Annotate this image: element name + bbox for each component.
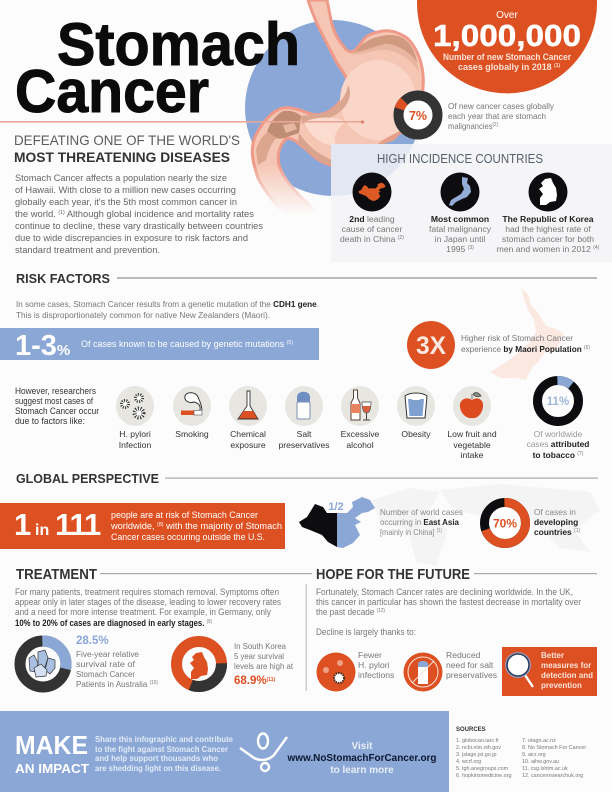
- text: researchers suggest: Stomach Cancer occur: [15, 406, 99, 416]
- callout: over 1,000,000: (1): [554, 63, 560, 69]
- stomach illustration: [252, 0, 423, 216]
- caption: tobacco: to tobacco: [533, 450, 575, 460]
- caption: China: [340, 214, 404, 244]
- banner: 1 in 111: 111: [55, 507, 101, 542]
- banner: 1-3%: [0, 328, 319, 362]
- caption: Japan: Most common: [431, 214, 489, 224]
- caption: Japan: in Japan until: [435, 234, 485, 244]
- text: visit: [287, 741, 436, 776]
- panel: better measures: [502, 647, 597, 696]
- map: China half highlighted: [299, 497, 375, 548]
- text: researchers suggest: suggest most cases of: [15, 396, 93, 406]
- text: hope paragraph: [316, 587, 581, 637]
- icon: obesity scale: [397, 386, 435, 426]
- text: Australia survival: (10): [150, 680, 158, 686]
- text: reduced salt: preservatives: [446, 670, 497, 680]
- banner: 1 in 111: worldwide,: [111, 521, 153, 531]
- risk factor labels: [119, 429, 497, 460]
- arrow line pointing to stomach: [0, 120, 364, 124]
- callout: 3X: [407, 321, 590, 369]
- callout: over 1,000,000: [417, 0, 597, 93]
- text: treatment paragraph: 10% to 20% of cases are diagnosed in early stages.: [15, 618, 229, 628]
- donut: 7%: 7%: [409, 109, 427, 123]
- subtitle: MOST THREATENING DISEASES: [14, 149, 230, 165]
- callout: 3X: Higher risk of Stomach Cancer: [461, 333, 573, 343]
- text: reduced salt: Reduced: [446, 650, 481, 660]
- text: 7% description: Of new cancer cases globally: [448, 101, 555, 111]
- icon: apple: [453, 386, 491, 426]
- text: Australia survival: 28.5%: [76, 635, 109, 647]
- text: East Asia: occurring in East Asia: [380, 517, 459, 527]
- icon: alcohol: [341, 386, 379, 426]
- intro paragraph: continue to decline, these vary drastically between countries: [15, 221, 263, 231]
- text: developing countries: (1): [574, 528, 580, 534]
- text: developing countries: developing: [534, 517, 578, 527]
- text: South Korea survival: [234, 641, 294, 687]
- caption: Japan: [429, 214, 492, 254]
- text: fewer H. pylori: H. pylori: [358, 660, 390, 670]
- caption: Korea: had the highest rate of: [505, 224, 591, 234]
- text: hope paragraph: the past decade: [316, 607, 379, 617]
- text: East Asia: (1): [437, 528, 442, 534]
- text: CDH1 gene: [16, 299, 319, 320]
- text: hope paragraph: Fortunately, Stomach Cancer rates are declining worldwide. In the UK,: [316, 587, 573, 597]
- text: researchers suggest: [15, 386, 99, 426]
- heading: global perspective: GLOBAL PERSPECTIVE: [16, 471, 159, 486]
- text: developing countries: Of cases in: [534, 507, 576, 517]
- callout: 3X: experience by Maori Population: [461, 344, 583, 354]
- text: CDH1 gene: In some cases, Stomach Cancer results from a genetic mutation of the CDH1 gene.: [16, 299, 319, 309]
- panel: better measures: measures for: [541, 661, 591, 670]
- map: New Zealand: [490, 288, 564, 380]
- text: reduced salt: need for salt: [446, 660, 494, 670]
- risk factor labels: Obesity: [401, 429, 431, 439]
- title: Stomach: [57, 11, 300, 78]
- intro paragraph: due to wide discrepancies in exposure to risk factors and: [15, 233, 248, 243]
- panel: better measures: prevention: [541, 681, 582, 690]
- sources: 1. globocan.iarc.fr: [456, 738, 499, 744]
- sources: 9. aicr.org: [522, 752, 546, 758]
- sources: 11. csg.lshtm.ac.uk: [522, 766, 568, 772]
- icon: chemical flask: [229, 386, 267, 426]
- divider: [306, 584, 307, 691]
- sources: SOURCES: [456, 727, 486, 733]
- risk factor labels: intake: [461, 450, 484, 460]
- text: South Korea survival: (11): [267, 677, 276, 683]
- caption: Japan: (3): [468, 245, 474, 251]
- caption: tobacco: Of worldwide: [534, 429, 583, 439]
- text: treatment paragraph: [15, 587, 282, 628]
- heading: high incidence countries: HIGH INCIDENCE COUNTRIES: [377, 152, 543, 166]
- text: reduced salt: [446, 650, 497, 680]
- text: Australia survival: Five-year relative: [76, 649, 139, 659]
- sources: 4. wcrf.org: [456, 759, 481, 765]
- panel: make an impact: [0, 711, 449, 792]
- text: treatment paragraph: (9): [207, 619, 212, 625]
- caption: China: 2nd leading: [349, 214, 395, 224]
- text: Australia survival: [76, 635, 158, 689]
- banner: 1-3%: 1-3%: [15, 330, 70, 362]
- banner: 1-3%: (5): [287, 340, 293, 346]
- map: China half highlighted: 1/2: [328, 501, 344, 513]
- text: 7% description: [448, 101, 555, 131]
- text: hope paragraph: Decline is largely thanks to:: [316, 627, 416, 637]
- donut: 68.9% with Korea: [176, 642, 222, 686]
- callout: over 1,000,000: cases globally in 2018: [458, 62, 556, 72]
- risk factor labels: Chemical: [230, 429, 266, 439]
- sources: 10. aihw.gov.au: [522, 759, 559, 765]
- subtitle: DEFEATING ONE OF THE WORLD'S: [14, 132, 240, 148]
- panel: high incidence countries: [331, 144, 612, 262]
- intro paragraph: Stomach Cancer affects a population nearly the size: [15, 173, 227, 183]
- icon: H. pylori: [116, 386, 154, 426]
- donut: 11% tobacco: [538, 380, 578, 422]
- donut: 70%: 70%: [493, 516, 517, 530]
- text: share: Share this infographic and contribute: [95, 734, 233, 744]
- text: CDH1 gene: This is disproportionately common for native New Zealanders (Maori).: [16, 310, 270, 320]
- sources: 12. cancerresearchuk.org: [522, 773, 583, 779]
- title: [15, 11, 300, 125]
- text: 7% description: (2): [493, 122, 498, 128]
- sources: 5. tgh.anegroups.com: [456, 766, 509, 772]
- donut: 7%: [393, 90, 443, 140]
- text: share: are shedding light on this disease.: [95, 763, 221, 773]
- text: visit: www.NoStomachForCancer.org: [287, 752, 436, 764]
- text: researchers suggest: However, researchers: [15, 386, 97, 396]
- sources: 8. No Stomach For Cancer: [522, 745, 586, 751]
- sources: 3. jstage.jst.go.jp: [456, 752, 496, 758]
- text: East Asia: [mainly in China]: [380, 527, 442, 537]
- intro paragraph: the world.: [15, 209, 55, 219]
- caption: Korea: men and women in 2012: [497, 244, 591, 254]
- icon: Japan map: [440, 172, 480, 212]
- text: 7% description: malignancies: [448, 121, 498, 131]
- callout: 3X: (6): [584, 345, 590, 351]
- risk factor labels: Low fruit and: [447, 429, 497, 439]
- risk factor labels: exposure: [230, 440, 266, 450]
- world map background: [372, 484, 600, 566]
- sources: [456, 727, 586, 779]
- text: fewer H. pylori: Fewer: [358, 650, 382, 660]
- callout: over 1,000,000: 1,000,000: [433, 18, 581, 53]
- banner: 1 in 111: 1: [14, 507, 31, 542]
- caption: Korea: [497, 214, 600, 254]
- title: Cancer: [15, 58, 209, 125]
- text: fewer H. pylori: infections: [358, 670, 394, 680]
- donut: 70%: [480, 498, 530, 548]
- text: Australia survival: survival rate of: [76, 659, 136, 669]
- banner: 1 in 111: people are at risk of Stomach Cancer: [111, 510, 258, 520]
- donut: 28.5% with hands: [20, 641, 66, 687]
- text: treatment paragraph: appear only in later stages of the disease, leading to lower recovery rates: [15, 597, 282, 607]
- text: hope paragraph: this cancer in particular has shown the fastest decrease in mortality over: [316, 597, 581, 607]
- heading: hope for the future: HOPE FOR THE FUTURE: [316, 566, 470, 583]
- caption: China: (2): [398, 235, 404, 241]
- risk factor labels: Infection: [119, 440, 151, 450]
- banner: 1 in 111: [0, 503, 285, 549]
- risk factor labels: vegetable: [453, 440, 491, 450]
- banner: 1 in 111: in: [35, 522, 49, 539]
- heading: risk factors: RISK FACTORS: [16, 271, 110, 286]
- text: East Asia: [380, 507, 463, 537]
- callout: 3X: 3X: [416, 332, 446, 360]
- heading: treatment: TREATMENT: [16, 566, 97, 583]
- panel: make an impact: AN IMPACT: [15, 761, 89, 776]
- text: Australia survival: Patients in Australia: [76, 679, 151, 689]
- text: treatment paragraph: For many patients, treatment requires stomach removal. Symptoms often: [15, 587, 279, 597]
- icon: magnifying glass: [506, 653, 533, 687]
- text: South Korea survival: 68.9%: [234, 675, 267, 687]
- text: share: and help support thousands who: [95, 753, 218, 763]
- caption: China: cause of cancer: [342, 224, 402, 234]
- text: treatment paragraph: and a need for more intense treatment. For example, in Germany, only: [15, 607, 272, 617]
- icon: reduced salt: [404, 652, 442, 692]
- callout: over 1,000,000: Number of new Stomach Cancer: [443, 52, 571, 62]
- risk factor labels: alcohol: [346, 440, 374, 450]
- icon: salt shaker: [285, 386, 323, 426]
- risk factor labels: H. pylori: [119, 429, 151, 439]
- caption: Japan: 1995: [446, 244, 465, 254]
- text: share: [95, 734, 233, 773]
- icon: Korea map: [528, 172, 568, 212]
- sources: 2. ncbi.nlm.nih.gov: [456, 745, 501, 751]
- caption: Korea: stomach cancer for both: [502, 234, 594, 244]
- intro paragraph: (1): [58, 210, 65, 216]
- icon: smoking: [173, 386, 211, 426]
- callout: over 1,000,000: Over: [496, 10, 519, 21]
- intro paragraph: Although global incidence and mortality rates: [65, 209, 254, 219]
- text: South Korea survival: 5 year survival: [234, 651, 284, 661]
- panel: better measures: Better: [541, 651, 564, 660]
- text: South Korea survival: In South Korea: [234, 641, 286, 651]
- banner: 1-3%: Of cases known to be caused by genetic mutations: [81, 339, 280, 349]
- risk factor labels: preservatives: [278, 440, 330, 450]
- text: Australia survival: Stomach Cancer: [76, 669, 135, 679]
- sources: 7. otago.ac.nz: [522, 738, 556, 744]
- intro paragraph: [15, 173, 263, 255]
- sources: 6. hopkinsmedicine.org: [456, 773, 511, 779]
- donut: 11% tobacco: 11%: [547, 396, 569, 408]
- icon: raised hands: [29, 650, 55, 677]
- risk factor labels: Excessive: [341, 429, 380, 439]
- text: developing countries: countries: [534, 527, 572, 537]
- caption: Korea: (4): [593, 245, 600, 251]
- caption: tobacco: (7): [577, 451, 584, 457]
- caption: China: death in China: [340, 234, 395, 244]
- text: visit: Visit: [352, 741, 373, 752]
- icon: China map: [352, 172, 392, 212]
- intro paragraph: of Hawaii. With close to a million new cases occurring: [15, 185, 236, 195]
- text: researchers suggest: due to factors like:: [15, 416, 85, 426]
- risk factor labels: Smoking: [175, 429, 209, 439]
- intro paragraph: globally each year, it's the 5th most common cancer in: [15, 197, 237, 207]
- caption: tobacco: [527, 429, 589, 460]
- banner: 1 in 111: Cancer cases occuring outside the U.S.: [111, 532, 265, 542]
- text: hope paragraph: (12): [377, 608, 385, 614]
- text: fewer H. pylori: [358, 650, 394, 680]
- blue background circle: [245, 20, 421, 196]
- panel: make an impact: MAKE: [15, 730, 88, 760]
- text: East Asia: Number of world cases: [380, 507, 463, 517]
- subtitle: [14, 132, 240, 165]
- icon: person logo: [240, 734, 287, 771]
- caption: tobacco: cases attributed: [527, 439, 589, 449]
- banner: 1 in 111: (8): [157, 522, 164, 528]
- caption: Korea: The Republic of Korea: [502, 214, 594, 224]
- panel: better measures: detection and: [541, 671, 593, 680]
- text: share: to the fight against Stomach Cancer: [95, 744, 229, 754]
- text: developing countries: [534, 507, 580, 537]
- text: visit: to learn more: [330, 765, 394, 776]
- text: South Korea survival: levels are high at: [234, 661, 294, 671]
- caption: Japan: fatal malignancy: [429, 224, 492, 234]
- intro paragraph: standard treatment and prevention.: [15, 245, 160, 255]
- icon: fewer H. pylori: [316, 652, 356, 692]
- risk factor labels: Salt: [297, 429, 312, 439]
- text: 7% description: each year that are stomach: [448, 111, 546, 121]
- banner: 1 in 111: with the majority of Stomach: [164, 521, 282, 531]
